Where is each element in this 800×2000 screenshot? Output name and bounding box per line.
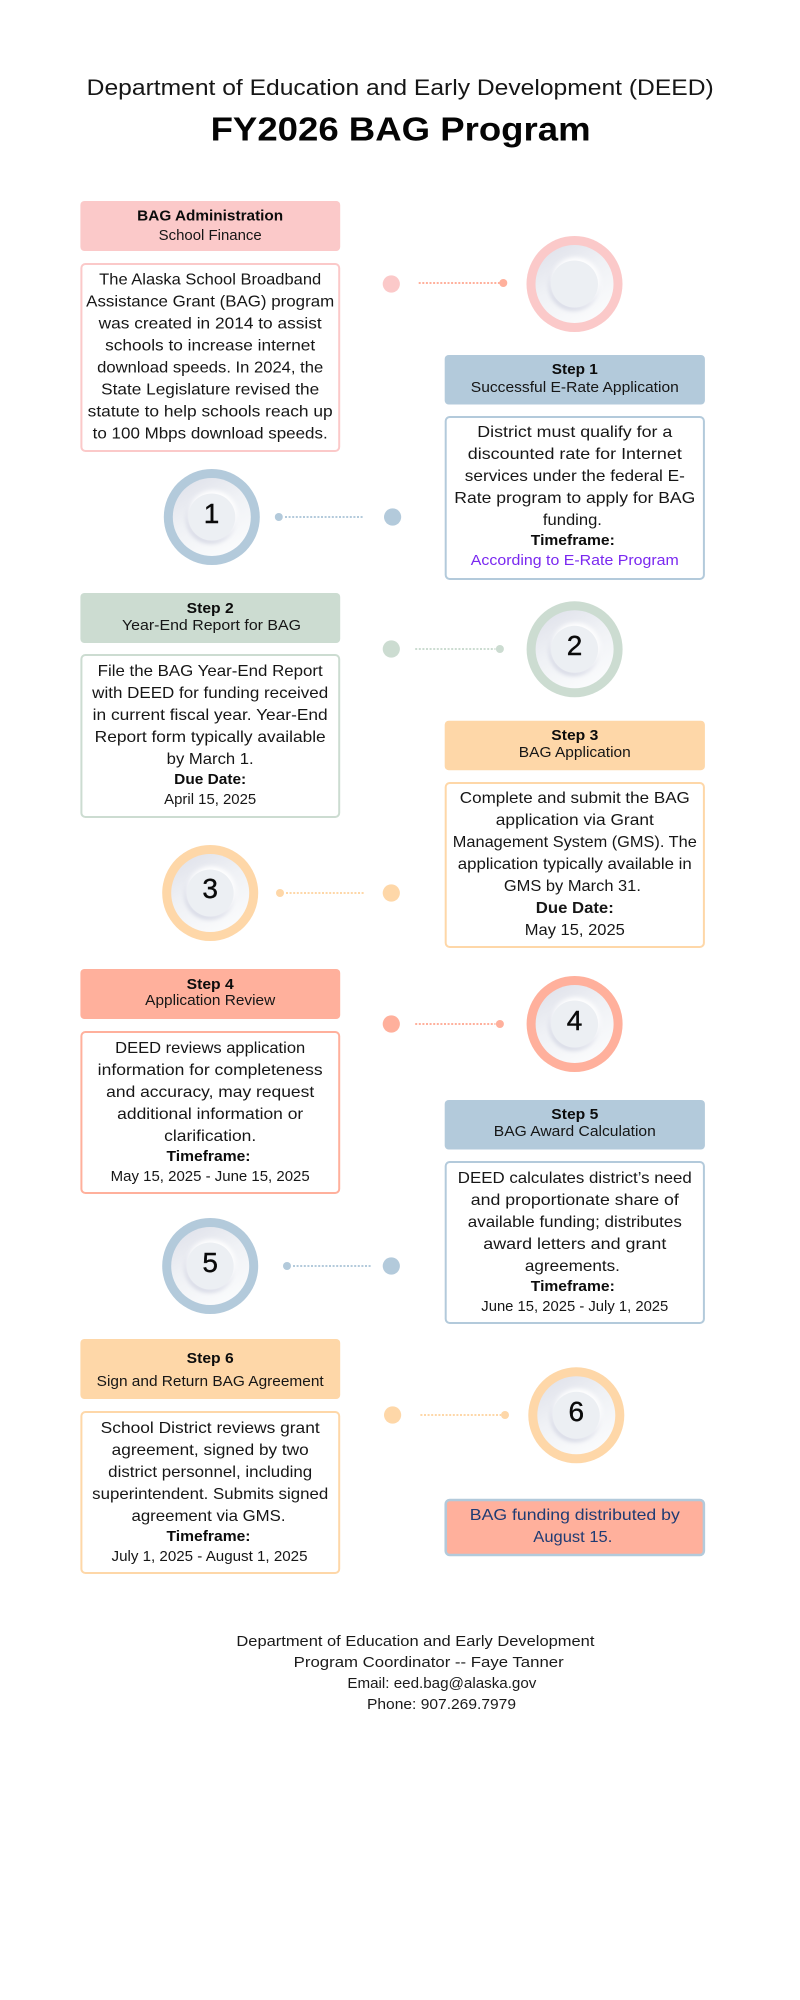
icon: number 3 badge	[162, 845, 258, 941]
text block: Step 4 description: information for completeness	[98, 1062, 323, 1079]
heading box: Step 5: BAG Award Calculation	[494, 1124, 656, 1140]
footer: contact information: Program Coordinator -- Faye Tanner	[294, 1654, 564, 1671]
header: department title: Department of Education and Early Development (DEED)	[87, 75, 714, 100]
text block: Step 3 description: Management System (GMS). The	[453, 834, 697, 851]
text block: BAG Administration description: schools to increase internet	[105, 337, 316, 354]
text block: Step 5 description	[446, 1162, 704, 1323]
heading box: Step 3: BAG Application	[519, 745, 631, 761]
panel: Step 4	[80, 969, 340, 1193]
panel: Step 1	[445, 355, 705, 579]
text block: Step 6 description	[81, 1412, 339, 1573]
text block: Step 1 description: Timeframe:	[531, 533, 615, 549]
text block: BAG Administration description: to 100 Mbps download speeds.	[93, 425, 328, 442]
text block: Step 4 description: additional information or	[117, 1106, 304, 1123]
icon: number 4 badge: 4	[567, 1005, 582, 1036]
text block: Step 1 description: funding.	[543, 512, 602, 529]
heading box: Step 6: Step 6	[187, 1351, 234, 1367]
heading box: Step 6: Sign and Return BAG Agreement	[97, 1374, 324, 1390]
text block: Step 2 description: by March 1.	[167, 751, 254, 768]
icon: number 5 badge	[162, 1218, 258, 1314]
icon: number 1 badge: 1	[204, 498, 219, 529]
text block: Step 6 description: agreement, signed by two	[112, 1442, 309, 1459]
heading box: Step 4	[80, 969, 340, 1019]
footer: contact information: Department of Education and Early Development	[236, 1633, 595, 1650]
text block: Step 1 description: According to E-Rate Program	[471, 553, 679, 569]
heading box: Step 4: Step 4	[187, 977, 234, 993]
text block: Step 5 description: available funding; distributes	[468, 1214, 682, 1231]
callout: funding distributed: BAG funding distributed by	[470, 1507, 680, 1524]
text block: Step 2 description: File the BAG Year-End Report	[98, 663, 323, 680]
connector: step 2	[383, 640, 504, 658]
icon: number 5 badge: 5	[202, 1247, 218, 1278]
text block: Step 6 description: superintendent. Submits signed	[92, 1486, 328, 1503]
text block: Step 4 description: Timeframe:	[166, 1149, 250, 1165]
text block: Step 4 description	[81, 1032, 339, 1193]
icon: number 3 badge: 3	[202, 873, 218, 904]
heading box: Step 6	[80, 1339, 340, 1399]
connector: step 5	[283, 1257, 400, 1275]
text block: BAG Administration description: The Alaska School Broadband	[99, 271, 321, 288]
connector: step 4	[383, 1015, 504, 1033]
text block: BAG Administration description: was created in 2014 to assist	[98, 315, 322, 332]
text block: Step 3 description: application typically available in	[458, 856, 692, 873]
icon: number 1 badge	[164, 469, 260, 565]
text block: Step 2 description	[81, 655, 339, 817]
heading box: Step 2: Step 2	[187, 601, 234, 617]
text block: Step 6 description: School District reviews grant	[101, 1420, 320, 1437]
panel: Step 6	[80, 1339, 340, 1573]
connector: step 3	[276, 884, 400, 902]
heading box: Step 2: Year-End Report for BAG	[122, 618, 301, 634]
text block: Step 3 description: May 15, 2025	[525, 922, 625, 939]
panel: Step 3	[445, 721, 705, 947]
text block: Step 4 description: and accuracy, may request	[106, 1084, 315, 1101]
text block: Step 1 description: discounted rate for Internet	[468, 446, 682, 463]
text block: Step 5 description: DEED calculates district’s need	[458, 1170, 692, 1187]
text block: Step 6 description: July 1, 2025 - August 1, 2025	[112, 1549, 308, 1565]
heading box: Step 1	[445, 355, 705, 404]
text block: Step 2 description: in current fiscal year. Year-End	[93, 707, 328, 724]
heading box: BAG Administration	[80, 201, 340, 251]
text block: Step 3 description: application via Grant	[496, 812, 654, 829]
heading box: Step 1: Step 1	[552, 362, 598, 378]
icon: number 4 badge	[527, 976, 623, 1072]
icon: number 6 badge: 6	[569, 1396, 584, 1427]
callout: funding distributed	[446, 1500, 704, 1555]
connector: step 6	[384, 1406, 509, 1424]
heading box: Step 2	[80, 593, 340, 643]
text block: Step 6 description: district personnel, including	[108, 1464, 312, 1481]
callout: funding distributed: August 15.	[533, 1529, 612, 1546]
heading box: Step 1: Successful E-Rate Application	[471, 380, 679, 396]
heading box: Step 3	[445, 721, 705, 770]
icon: blank circle badge	[526, 236, 622, 332]
text block: Step 4 description: clarification.	[164, 1128, 256, 1145]
heading box: Step 4: Application Review	[145, 993, 276, 1009]
heading box: Step 5: Step 5	[551, 1107, 598, 1123]
text block: Step 1 description: District must qualify for a	[477, 424, 672, 441]
text block: Step 6 description: Timeframe:	[166, 1529, 250, 1545]
footer: contact information: Email: eed.bag@alaska.gov	[347, 1675, 537, 1692]
text block: Step 4 description: May 15, 2025 - June 15, 2025	[111, 1169, 310, 1185]
text block: Step 5 description: agreements.	[525, 1258, 620, 1275]
panel: Step 2	[80, 593, 340, 817]
heading box: Step 3: Step 3	[551, 728, 598, 744]
text block: Step 3 description	[446, 783, 704, 947]
text block: Step 1 description	[446, 417, 704, 579]
heading box: BAG Administration: School Finance	[159, 228, 262, 244]
text block: Step 5 description: and proportionate share of	[471, 1192, 679, 1209]
text block: Step 4 description: DEED reviews application	[115, 1040, 305, 1057]
text block: Step 3 description: Due Date:	[536, 900, 614, 917]
title: FY2026 BAG Program	[211, 111, 591, 148]
connector: step 1	[275, 508, 401, 526]
icon: number 6 badge	[528, 1367, 624, 1463]
text block: BAG Administration description: statute to help schools reach up	[88, 403, 333, 420]
heading box: Step 5	[445, 1100, 705, 1150]
panel: Step 5	[445, 1100, 705, 1323]
text block: Step 5 description: June 15, 2025 - July 1, 2025	[481, 1299, 668, 1315]
footer: contact information	[236, 1633, 595, 1713]
text block: Step 3 description: GMS by March 31.	[504, 878, 641, 895]
text block: BAG Administration description: State Legislature revised the	[101, 381, 319, 398]
text block: Step 1 description: services under the federal E-	[465, 468, 685, 485]
heading box: BAG Administration: BAG Administration	[137, 209, 283, 225]
text block: Step 5 description: award letters and grant	[483, 1236, 667, 1253]
text block: Step 1 description: Rate program to apply for BAG	[454, 490, 695, 507]
text block: BAG Administration description	[81, 264, 339, 451]
footer: contact information: Phone: 907.269.7979	[367, 1696, 516, 1713]
icon: number 2 badge	[527, 601, 623, 697]
connector: top blank node	[383, 275, 507, 293]
text block: Step 2 description: Report form typically available	[95, 729, 326, 746]
text block: BAG Administration description: Assistance Grant (BAG) program	[86, 293, 334, 310]
text block: Step 3 description: Complete and submit the BAG	[460, 790, 690, 807]
text block: Step 2 description: April 15, 2025	[164, 792, 256, 808]
text block: Step 2 description: Due Date:	[174, 772, 246, 788]
icon: number 2 badge: 2	[567, 630, 582, 661]
text block: Step 2 description: with DEED for funding received	[91, 685, 328, 702]
text block: BAG Administration description: download speeds. In 2024, the	[97, 359, 323, 376]
panel: BAG Administration	[80, 201, 340, 451]
text block: Step 5 description: Timeframe:	[531, 1279, 615, 1295]
text block: Step 6 description: agreement via GMS.	[132, 1508, 286, 1525]
